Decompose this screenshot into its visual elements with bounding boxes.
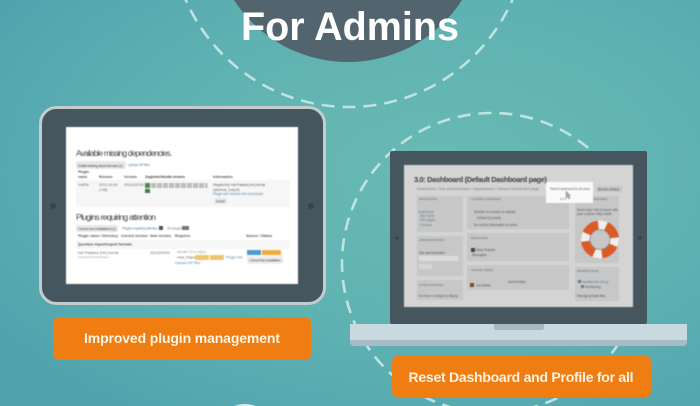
heading: available missing dependencies: Available missing dependencies.	[76, 149, 172, 158]
label: improved plugin management	[53, 317, 311, 360]
left column panels: Courses	[420, 223, 432, 227]
left column panels: Site pages	[420, 218, 435, 222]
tablet screen: plugin management screenshot: Supported Moodle versions	[145, 175, 185, 179]
tablet screen: plugin management screenshot: Plugins requiring attention	[122, 226, 158, 230]
right column panels: Numbering	[585, 285, 601, 289]
middle column panels: MESSAGES	[471, 236, 488, 240]
tablet screen: plugin management screenshot	[66, 127, 298, 284]
tablet body	[40, 108, 324, 304]
right column panels	[575, 196, 619, 301]
tablet screen: plugin management screenshot: 2013100702	[124, 183, 144, 187]
laptop camera left	[395, 236, 399, 240]
tablet screen: plugin management screenshot: Upload ZIP files	[175, 261, 201, 265]
icon: lifebuoy	[586, 225, 614, 254]
right column panels: Manage private files	[577, 294, 606, 298]
middle column panels: COURSE OVERVIEW	[471, 197, 501, 201]
tablet screen: plugin management screenshot: Information	[213, 175, 233, 179]
right column panels: PRIVATE FILES	[577, 269, 599, 273]
dashed circle: laptop	[342, 113, 642, 406]
title: For Admins	[241, 5, 459, 49]
tablet screen: plugin management screenshot: Plugin info Version info Download	[213, 192, 263, 196]
tablet screen: plugin management screenshot: Question import/export formats	[78, 242, 132, 246]
tablet screen: plugin management screenshot: Version	[124, 175, 137, 179]
tablet screen: plugin management screenshot: Hot Potatoes (HV) format	[78, 251, 118, 255]
tablet camera right	[308, 203, 314, 209]
middle column panels: Joe Admin	[476, 284, 491, 288]
tablet screen: plugin management screenshot: Source / Status	[246, 234, 272, 238]
tablet screen: plugin management screenshot: 2013100702	[150, 251, 170, 255]
tablet screen: plugin management screenshot: Requires	[175, 234, 190, 238]
middle column panels: No course information to show.	[474, 223, 518, 227]
tablet screen: plugin management screenshot: Install missing dependencies (1)	[78, 164, 124, 168]
laptop lid	[390, 151, 647, 324]
tablet screen: plugin management screenshot: VoIPM	[78, 183, 89, 187]
highlighted button: reset dashboard for all users: EDIT	[560, 197, 567, 201]
middle column panels: ONLINE USERS	[471, 268, 493, 272]
left column panels	[417, 196, 463, 300]
dark title circle	[212, 0, 484, 62]
tablet screen: plugin management screenshot: Cancel this installation	[249, 258, 281, 262]
laptop base	[350, 324, 687, 346]
right column panels: your Learner Help Desk!	[577, 212, 612, 216]
dashed circle: bottom fragment	[229, 404, 261, 406]
laptop screen: dashboard screenshot	[404, 165, 633, 307]
tablet screen: plugin management screenshot: Current version	[121, 234, 148, 238]
highlighted button: reset dashboard for all users	[546, 182, 593, 203]
tablet screen: plugin management screenshot: New version	[150, 234, 171, 238]
tablet screen: plugin management screenshot: (qformat_hotpot)	[213, 188, 240, 192]
right column panels: Needlework Group	[582, 280, 609, 284]
tablet screen: plugin management screenshot: upload ZIP files	[128, 163, 150, 167]
dashed circle: top	[171, 0, 527, 107]
tablet screen: plugin management screenshot: Release	[99, 175, 113, 179]
tablet screen: plugin management screenshot: Plugin info	[226, 256, 243, 260]
middle column panels: Number of courses to display:	[474, 210, 516, 214]
tablet	[40, 108, 324, 304]
left column panels: You have no badges to display	[418, 294, 458, 298]
label: reset dashboard and profile for all	[392, 355, 651, 398]
laptop screen: dashboard screenshot: Dashboard / Site administration / Appearance / Default Dashboard page	[417, 187, 539, 191]
tablet screen: plugin management screenshot: mod_hotpot	[177, 256, 196, 260]
tablet screen: plugin management screenshot: Install	[216, 200, 225, 204]
tablet screen: plugin management screenshot: name	[78, 175, 87, 179]
tablet screen: plugin management screenshot: Moodle 2.5 or higher	[177, 250, 207, 254]
tablet screen: plugin management screenshot: /question/format/hotpot	[78, 255, 109, 259]
middle column panels: Not Enrolled	[508, 280, 526, 284]
tablet camera left	[50, 203, 56, 209]
label: improved plugin management: Improved plugin management	[84, 330, 280, 346]
left column panels: LATEST BADGES	[419, 283, 443, 287]
tablet screen: plugin management screenshot: Plugin name / Directory	[78, 234, 118, 238]
laptop camera right	[638, 236, 642, 240]
left column panels: ADMINISTRATION	[419, 238, 444, 242]
left column panels: Site administration	[419, 251, 445, 255]
laptop	[350, 151, 687, 346]
middle column panels: Mary Teacher	[476, 248, 496, 252]
tablet screen: plugin management screenshot: Required by: Hot Potatoes (HV) format	[213, 183, 265, 187]
left column panels: NAVIGATION	[419, 197, 437, 201]
tablet screen: plugin management screenshot: All plugins	[167, 226, 184, 230]
laptop screen: dashboard screenshot: Blocks default	[598, 188, 619, 192]
right column panels: COURSE OVERVIEW	[577, 197, 607, 201]
label: reset dashboard and profile for all: Reset Dashboard and Profile for all	[408, 369, 634, 385]
highlighted button: reset dashboard for all users: Reset Dashboard for all users	[550, 187, 590, 191]
left column panels: Site home	[420, 214, 435, 218]
tablet screen: plugin management screenshot: Plugin	[78, 170, 89, 174]
heading: dashboard: 3.0: Dashboard (Default Dashboard page)	[414, 175, 548, 184]
tablet screen: plugin management screenshot: Cancel new installations (1)	[78, 227, 116, 231]
middle column panels: Default (Current)	[477, 216, 501, 220]
middle column panels: Messages	[472, 253, 487, 257]
tablet screen: plugin management screenshot: (+96)	[99, 188, 108, 192]
tablet screen: plugin management screenshot: 2013-10-09	[99, 183, 117, 187]
heading: plugins requiring attention: Plugins requiring attention	[76, 212, 156, 222]
left column panels: Dashboard	[418, 210, 434, 214]
right column panels: Need help? Get in touch with	[577, 208, 618, 212]
middle column panels	[467, 196, 569, 290]
